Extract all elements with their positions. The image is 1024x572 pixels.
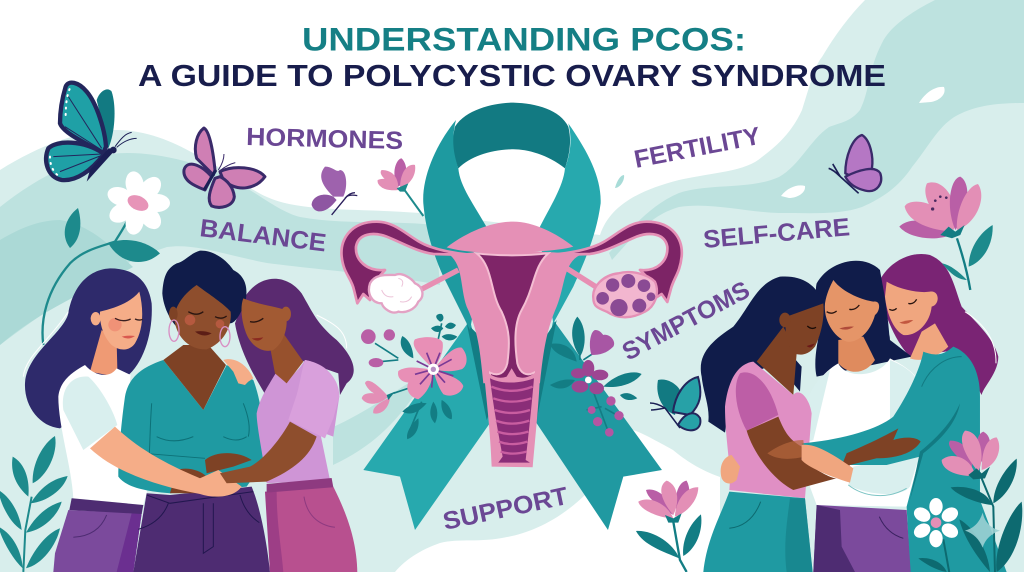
- butterfly: pink: [184, 128, 265, 207]
- woman three hair: [235, 279, 354, 397]
- title line 1: UNDERSTANDING PCOS:: [302, 22, 746, 58]
- woman three shirt: [257, 360, 339, 483]
- butterfly: small teal center right: [650, 377, 700, 430]
- magenta flower: [571, 360, 608, 394]
- middle woman neck: [838, 337, 875, 372]
- pink tulip top centre: [378, 158, 423, 216]
- fallopian tubes: [341, 222, 682, 303]
- right woman neck and face: [885, 282, 948, 360]
- top right pink flower: [899, 177, 993, 290]
- sparkle: [965, 513, 1000, 548]
- ribbon right tail: [533, 320, 662, 530]
- hand on side: [721, 455, 740, 484]
- left woman skirt: [703, 492, 813, 572]
- butterfly: large teal: [46, 83, 137, 182]
- awareness ribbon: [363, 103, 662, 530]
- uterus diagram: [341, 222, 682, 467]
- stems and leaves: [918, 459, 1022, 572]
- spray buds: [361, 329, 395, 367]
- left woman neck and face: [757, 303, 824, 395]
- large pink flower: [398, 337, 467, 399]
- uterus fundus: [447, 222, 573, 255]
- left women group: [0, 218, 357, 572]
- woman two hair: [162, 251, 246, 327]
- left healthy ovary: [369, 274, 422, 313]
- ribbon left strand: [423, 120, 488, 330]
- spray leaves: [550, 317, 642, 400]
- keyword: fertility: FERTILITY: [632, 122, 763, 174]
- right woman hair: [878, 254, 998, 395]
- woman one belt: [69, 498, 143, 514]
- right women group: [701, 254, 1007, 572]
- woman one neck: [90, 330, 117, 377]
- berries: [588, 396, 624, 437]
- middle woman face: [825, 280, 879, 342]
- left woman hair: [701, 276, 823, 433]
- middle woman hair: [815, 261, 912, 377]
- pink flower: [942, 431, 999, 479]
- vaginal canal inner: [490, 378, 534, 463]
- lower pink tulip: [636, 481, 701, 572]
- canal ridges: [491, 387, 533, 454]
- resting hand on shoulder: [223, 359, 253, 385]
- earrings: [169, 320, 230, 347]
- right polycystic ovary: [593, 272, 657, 317]
- bottom right foliage and flowers: [911, 431, 1022, 572]
- white daisy: [911, 498, 961, 572]
- hugging arms: [747, 417, 921, 490]
- leaf on left vine: [65, 208, 80, 248]
- white sleeve forearm hand: [802, 445, 853, 483]
- woman two head: [175, 285, 231, 349]
- keyword: balance: BALANCE: [198, 214, 328, 257]
- ribbon right strand: [538, 123, 601, 323]
- woman one shirt: [58, 365, 148, 505]
- right central floral spray: [550, 317, 642, 437]
- purple bud: [590, 330, 614, 355]
- butterfly: purple right: [829, 135, 881, 193]
- woman three sleeve: [288, 360, 339, 438]
- upper vine with leaves: [43, 218, 160, 345]
- title: [138, 22, 886, 93]
- left plant: [0, 436, 68, 572]
- vaginal canal outer: [484, 368, 540, 467]
- middle woman shirt: [805, 358, 920, 507]
- clasped arms: [170, 453, 252, 493]
- uterine cavity: [477, 253, 548, 387]
- spray stems: [375, 323, 442, 430]
- woman one face: [100, 292, 142, 349]
- spray stems: [578, 323, 617, 432]
- left woman shirt: [725, 362, 812, 498]
- woman two chest: [163, 345, 226, 410]
- ribbon left tail: [363, 320, 493, 530]
- small pink flower: [362, 381, 395, 414]
- keyword: hormones: HORMONES: [246, 123, 404, 155]
- ovary ligaments: [420, 268, 598, 290]
- daisy top left: [105, 170, 170, 236]
- keyword: symptoms: SYMPTOMS: [618, 276, 754, 366]
- uterus body: [450, 251, 580, 383]
- ribbon top loop: [453, 103, 570, 168]
- woman three face: [270, 333, 303, 383]
- woman one skirt: [53, 510, 142, 572]
- woman three belt: [267, 478, 333, 493]
- woman two top: [118, 360, 265, 493]
- spray leaves: [401, 314, 457, 439]
- middle woman trousers: [813, 505, 911, 572]
- woman two trousers: [133, 487, 270, 572]
- woman one hair: [25, 268, 152, 428]
- right woman top: [802, 347, 1007, 572]
- title line 2: A GUIDE TO POLYCYSTIC OVARY SYNDROME: [138, 58, 886, 93]
- keyword: support: SUPPORT: [440, 482, 570, 536]
- keyword: self-care: SELF-CARE: [702, 213, 851, 254]
- left central floral spray: [361, 314, 467, 439]
- white droplets: [615, 87, 945, 198]
- left woman sleeve: [736, 372, 778, 431]
- butterfly: purple side view: [312, 167, 357, 215]
- woman three skirt: [267, 487, 357, 572]
